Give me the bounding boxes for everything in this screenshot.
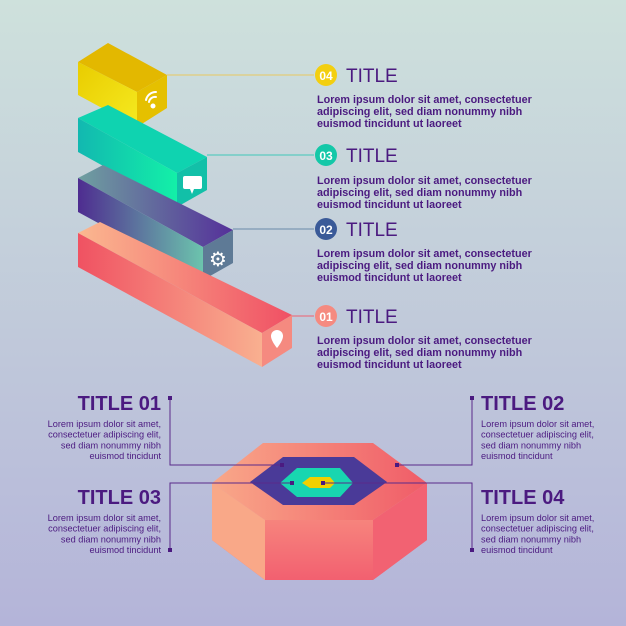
title 03 block: sed diam nonummy nibh [61,534,161,544]
title 04 block: TITLE 04 [481,487,565,509]
item 03: 03 [319,149,333,163]
item 02: euismod tincidunt ut laoreet [317,272,462,284]
hexagon prism [212,443,427,580]
item 03: adipiscing elit, sed diam nonummy nibh [317,187,522,199]
item 01: TITLE [346,307,398,328]
bar 02 purple [78,165,233,280]
title 04 block [481,487,594,555]
item 01: 01 [319,310,333,324]
title 03 block [48,487,161,555]
title 02 block: Lorem ipsum dolor sit amet, [481,419,594,429]
item 02: Lorem ipsum dolor sit amet, consectetuer [317,248,533,260]
title 01 block: Lorem ipsum dolor sit amet, [48,419,161,429]
title 01 block: consectetuer adipiscing elit, [48,430,161,440]
icon: wifi [146,92,156,108]
item 01 [315,305,533,371]
item 01: Lorem ipsum dolor sit amet, consectetuer [317,335,533,347]
item 04: adipiscing elit, sed diam nonummy nibh [317,106,522,118]
title 01 block: sed diam nonummy nibh [61,440,161,450]
icon: pin [271,330,283,348]
item 02: 02 [319,223,333,237]
item 02 [315,218,533,284]
item 04: TITLE [346,66,398,87]
title 01 block: euismod tincidunt [90,451,161,461]
bar 01 red [78,222,292,367]
title 02 block: euismod tincidunt [481,451,553,461]
title 04 block: sed diam nonummy nibh [481,534,581,544]
item 03 [315,144,533,211]
bar 03 teal [78,105,207,207]
bar 04 yellow [78,43,167,127]
item 04 [315,64,533,130]
item 03: TITLE [346,146,398,167]
item 02: adipiscing elit, sed diam nonummy nibh [317,260,522,272]
item 01: adipiscing elit, sed diam nonummy nibh [317,347,522,359]
title 02 block: consectetuer adipiscing elit, [481,430,594,440]
title 03 block: consectetuer adipiscing elit, [48,524,161,534]
title 04 block: Lorem ipsum dolor sit amet, [481,513,594,523]
icon: chat [183,176,202,194]
title 04 block: euismod tincidunt [481,545,553,555]
item 04: Lorem ipsum dolor sit amet, consectetuer [317,94,533,106]
item 04: euismod tincidunt ut laoreet [317,118,462,130]
title 03 block: Lorem ipsum dolor sit amet, [48,513,161,523]
connector lines [167,75,314,316]
item 03: euismod tincidunt ut laoreet [317,199,462,211]
title 01 block [48,393,161,461]
title 02 block [481,393,594,461]
title 02 block: sed diam nonummy nibh [481,440,581,450]
item 01: euismod tincidunt ut laoreet [317,359,462,371]
item 03: Lorem ipsum dolor sit amet, consectetuer [317,175,533,187]
item 04: 04 [319,69,333,83]
title 02 block: TITLE 02 [481,393,564,415]
icon: gear: ⚙ [209,247,227,271]
item 02: TITLE [346,220,398,241]
title 03 block: euismod tincidunt [90,545,161,555]
leader lines [168,396,474,552]
title 04 block: consectetuer adipiscing elit, [481,524,594,534]
title 01 block: TITLE 01 [78,393,161,415]
title 03 block: TITLE 03 [78,487,161,509]
